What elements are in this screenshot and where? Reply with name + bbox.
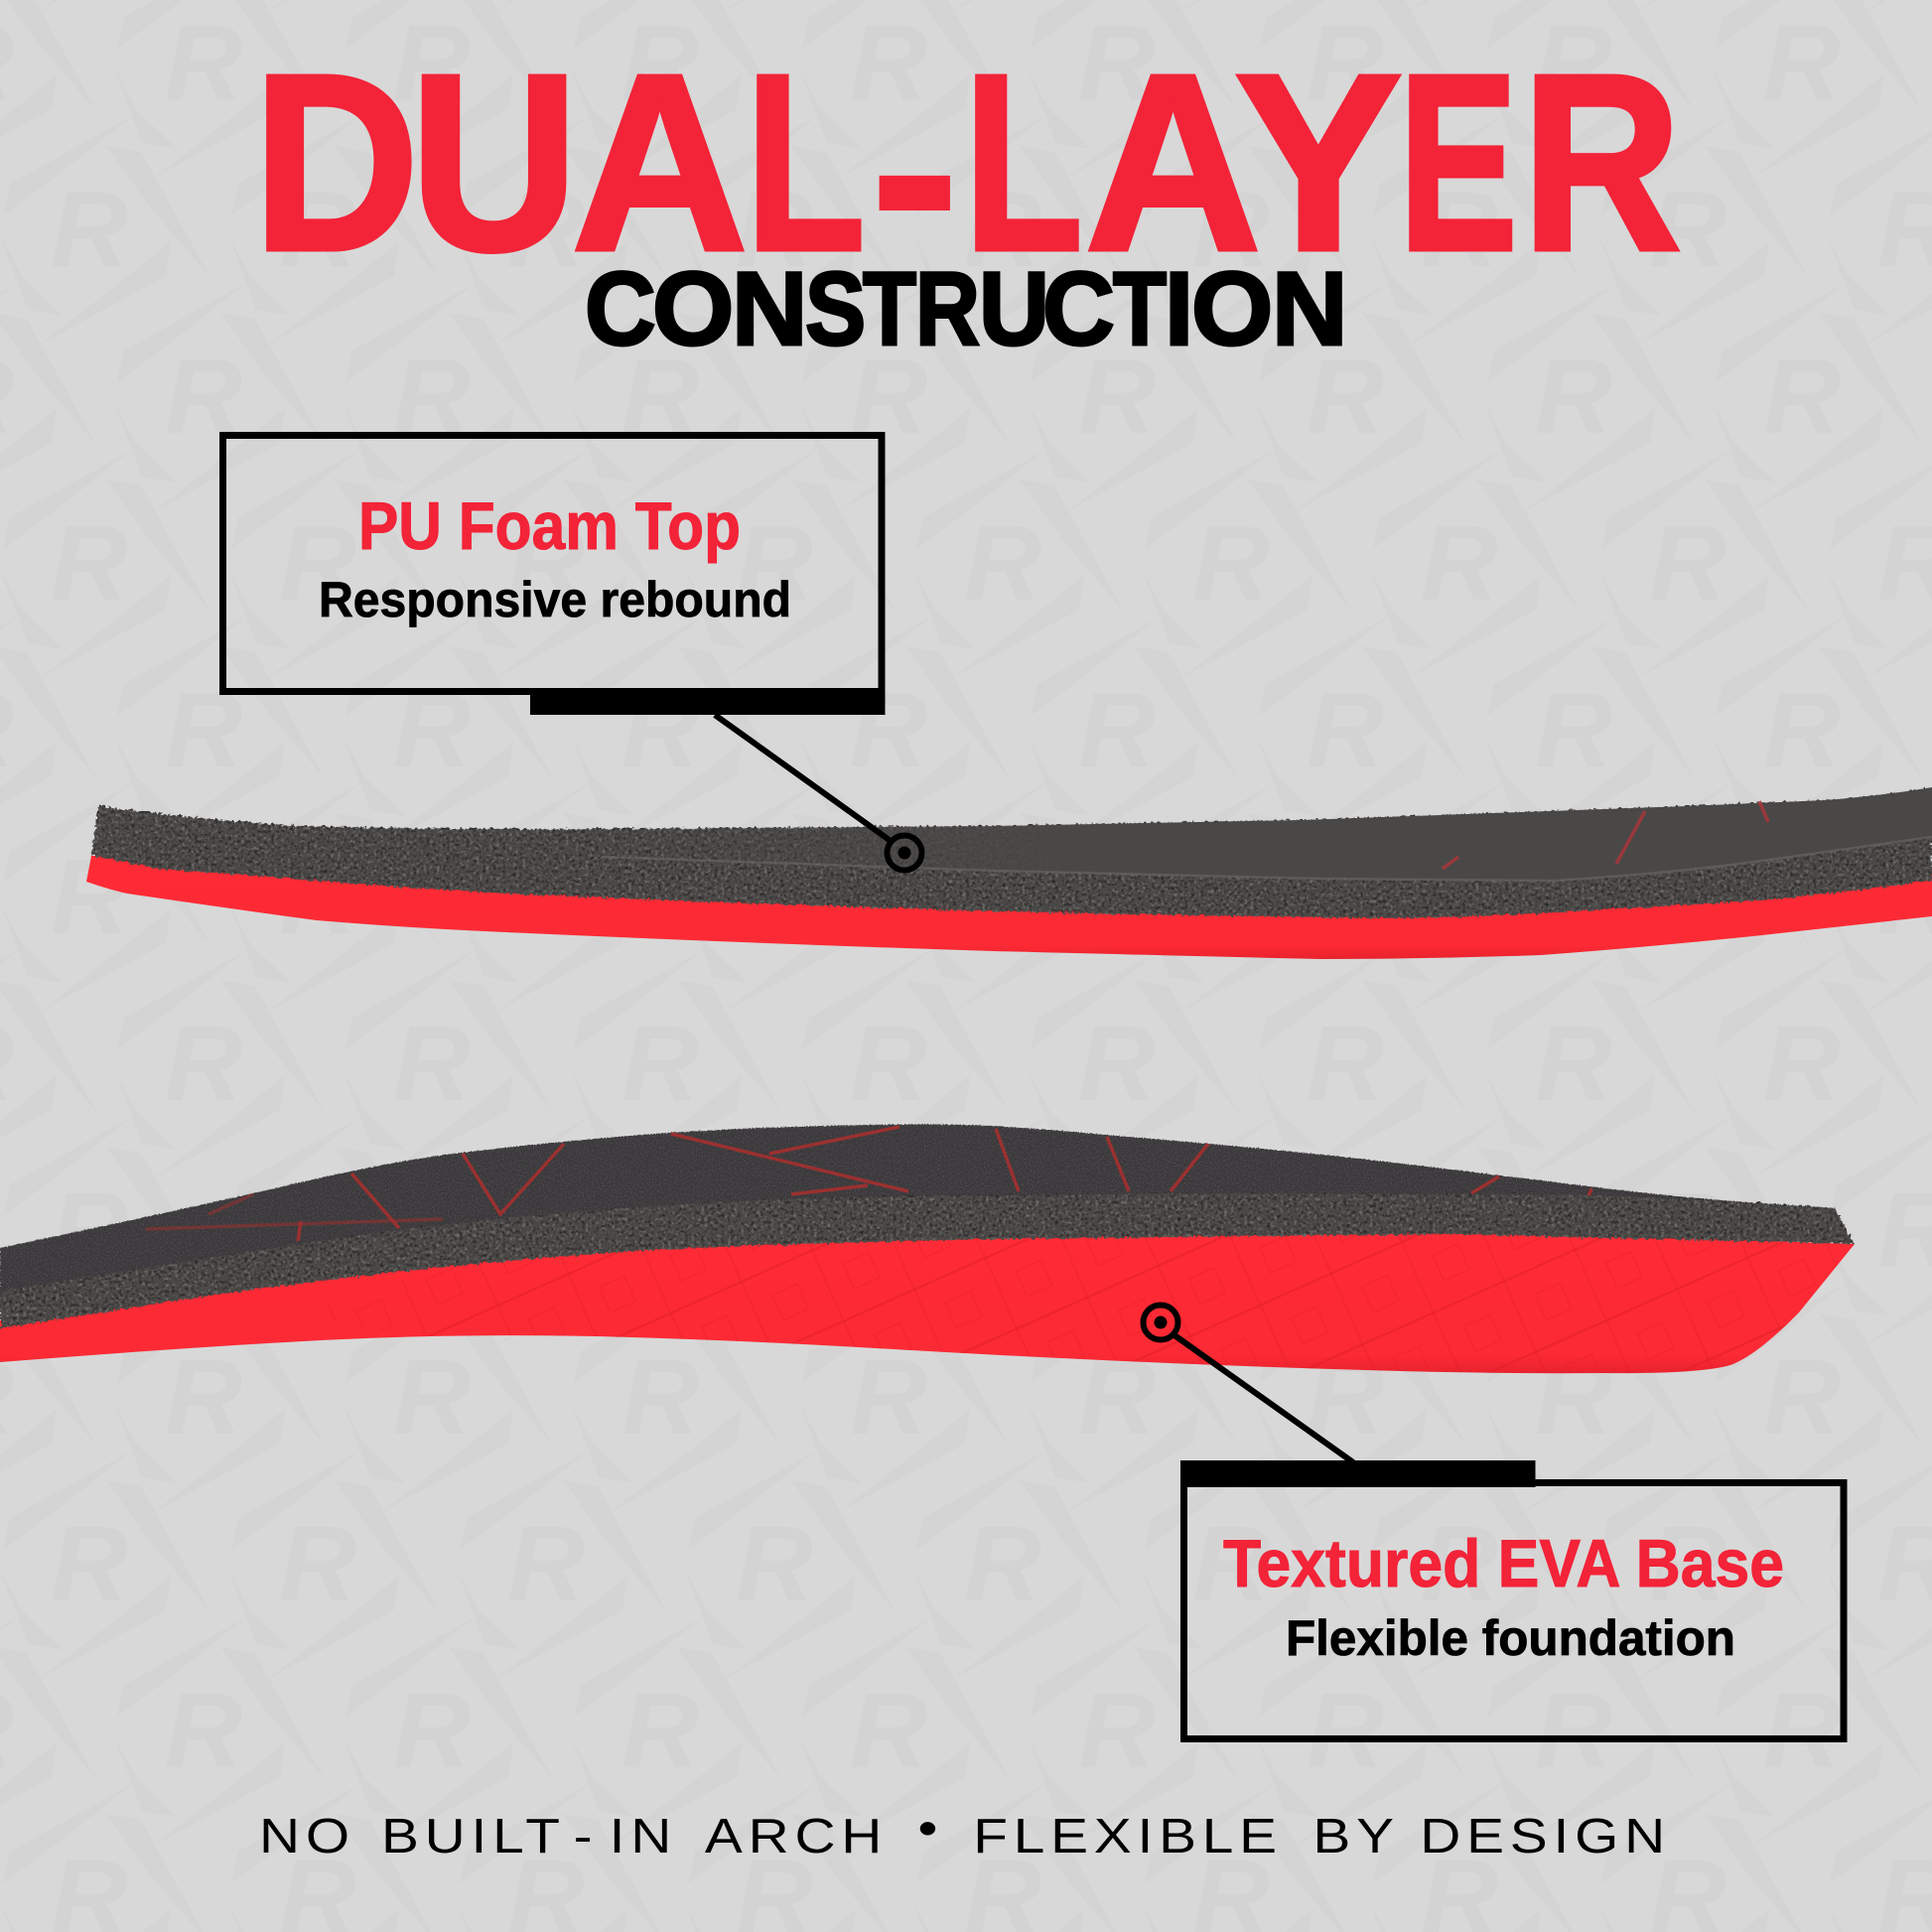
- dark foam layer, top insole: [91, 787, 1932, 918]
- callout tab bar: [1180, 1460, 1535, 1487]
- subtitle: CONSTRUCTION: C: [585, 251, 655, 367]
- footer tagline: FLEXIBLE: [973, 1810, 1304, 1863]
- footer tagline: IN: [610, 1810, 699, 1863]
- red stitching lines, top insole: [1443, 801, 1768, 869]
- subtitle: CONSTRUCTION: O: [1191, 251, 1273, 367]
- subtitle: CONSTRUCTION: N: [1272, 251, 1347, 367]
- callout: Textured EVA Base: [1180, 1460, 1844, 1739]
- title: DUAL-LAYER: A: [1084, 22, 1261, 303]
- footer tagline: -: [574, 1810, 598, 1863]
- callout: PU Foam Top: [222, 435, 886, 715]
- leader line and marker: EVA base: [1144, 1305, 1353, 1462]
- subtitle: CONSTRUCTION: I: [1165, 251, 1193, 367]
- subtitle: CONSTRUCTION: [585, 251, 1347, 367]
- subtitle: CONSTRUCTION: R: [915, 251, 980, 367]
- footer tagline: BUILT: [381, 1810, 566, 1863]
- footer tagline: DESIGN: [1420, 1810, 1671, 1863]
- subtitle: CONSTRUCTION: S: [805, 251, 866, 367]
- title: DUAL-LAYER: E: [1399, 22, 1518, 303]
- title: DUAL-LAYER: [253, 22, 1682, 312]
- subtitle: CONSTRUCTION: N: [732, 251, 807, 367]
- fabric top cover, bottom insole: [0, 1124, 1835, 1311]
- callout description: Responsive rebound: [319, 572, 791, 627]
- callout tab bar: [530, 688, 886, 715]
- subtitle: CONSTRUCTION: C: [1042, 251, 1114, 367]
- callout box frame: [1183, 1483, 1844, 1739]
- title: DUAL-LAYER: L: [746, 22, 866, 303]
- subtitle: CONSTRUCTION: T: [1112, 251, 1167, 367]
- insole: top view (PU foam edge): [86, 787, 1932, 959]
- footer tagline: NO: [259, 1810, 376, 1863]
- callout heading: Textured EVA Base: [1223, 1526, 1784, 1601]
- foam seam highlight, top insole: [602, 837, 1932, 881]
- insole: bottom view (textured EVA base): [0, 1124, 1855, 1373]
- red EVA layer, top insole: [86, 854, 1932, 959]
- title: DUAL-LAYER: A: [572, 22, 748, 303]
- fabric surface, top insole: [602, 787, 1932, 881]
- footer tagline: BY: [1312, 1810, 1420, 1863]
- title: DUAL-LAYER: R: [1522, 22, 1682, 303]
- footer tagline: •: [918, 1802, 965, 1856]
- red EVA base, bottom insole: [0, 1229, 1855, 1373]
- red stitching lines, bottom insole: [146, 1127, 1591, 1241]
- callout box frame: [222, 435, 882, 691]
- callout heading: PU Foam Top: [358, 488, 741, 564]
- callout description: Flexible foundation: [1286, 1610, 1735, 1666]
- footer tagline: ARCH: [705, 1810, 909, 1863]
- title: DUAL-LAYER: L: [964, 22, 1083, 303]
- title: DUAL-LAYER: Y: [1235, 22, 1401, 303]
- leader line and marker: PU foam: [715, 715, 921, 870]
- subtitle: CONSTRUCTION: T: [862, 251, 916, 367]
- title: DUAL-LAYER: U: [410, 22, 578, 303]
- title: DUAL-LAYER: -: [872, 31, 958, 312]
- dark foam layer, bottom insole: [0, 1193, 1855, 1328]
- title: DUAL-LAYER: D: [253, 22, 419, 303]
- subtitle: CONSTRUCTION: U: [979, 251, 1049, 367]
- subtitle: CONSTRUCTION: O: [652, 251, 734, 367]
